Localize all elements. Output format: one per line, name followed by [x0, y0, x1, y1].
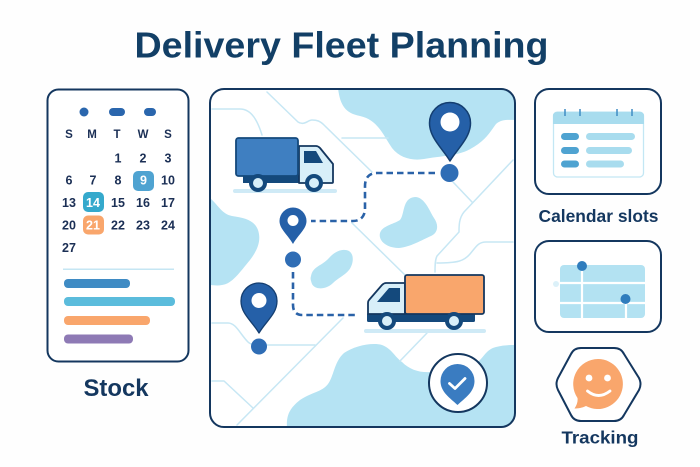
- route stop dot: [440, 164, 458, 182]
- calendar dates: 14: [86, 196, 100, 210]
- icon: check badge: [429, 354, 487, 412]
- truck: blue: [233, 138, 337, 193]
- route: dashed line lower: [293, 272, 358, 315]
- icon: map grid: [553, 261, 645, 318]
- icon: left location pin: [241, 283, 277, 333]
- calendar dates: 20: [62, 218, 76, 232]
- calendar dates: 6: [66, 174, 73, 188]
- calendar dates: 2: [140, 152, 147, 166]
- calendar date highlights: [83, 171, 154, 234]
- calendar dates: 15: [111, 196, 125, 210]
- calendar dates: 9: [140, 174, 147, 188]
- calendar weekday labels: T: [113, 129, 121, 141]
- calendar dates: 10: [161, 174, 175, 188]
- calendar weekday labels: W: [138, 129, 149, 141]
- truck: orange: [364, 275, 486, 333]
- label: tracking: Tracking: [562, 428, 638, 448]
- panel: route map: [209, 88, 516, 428]
- panel: calendar slots: [535, 89, 661, 194]
- calendar weekday labels: S: [164, 129, 172, 141]
- title: Delivery Fleet Planning: [134, 24, 548, 66]
- route stop dot: [251, 338, 267, 354]
- calendar dates: 21: [86, 218, 100, 232]
- calendar dates: 22: [111, 218, 125, 232]
- calendar weekday labels: [65, 129, 172, 141]
- calendar weekday labels: S: [65, 129, 73, 141]
- stock bars: [64, 279, 175, 344]
- calendar dates: 17: [161, 196, 175, 210]
- calendar dates: 3: [165, 152, 172, 166]
- calendar header dots: [80, 108, 156, 116]
- calendar dates: 13: [62, 196, 76, 210]
- calendar dates: 8: [115, 174, 122, 188]
- icon: large location pin: [430, 102, 470, 161]
- calendar dates: [62, 152, 175, 255]
- icon: medium location pin: [280, 208, 306, 244]
- panel: stock calendar: [48, 90, 188, 362]
- route: dashed line upper: [311, 173, 435, 221]
- calendar weekday labels: M: [87, 129, 97, 141]
- calendar dates: 27: [62, 241, 76, 255]
- label: stock: Stock: [84, 375, 149, 402]
- label: calendar slots: Calendar slots: [538, 206, 659, 226]
- icon: hexagon smile: [556, 348, 640, 421]
- calendar dates: 16: [136, 196, 150, 210]
- icon: calendar: [553, 109, 644, 177]
- calendar dates: 23: [136, 218, 150, 232]
- map water and roads: [209, 88, 516, 428]
- calendar dates: 7: [90, 174, 97, 188]
- calendar dates: 1: [115, 152, 122, 166]
- route stop dot: [285, 252, 301, 268]
- panel: grid map: [535, 241, 661, 332]
- calendar dates: 24: [161, 218, 175, 232]
